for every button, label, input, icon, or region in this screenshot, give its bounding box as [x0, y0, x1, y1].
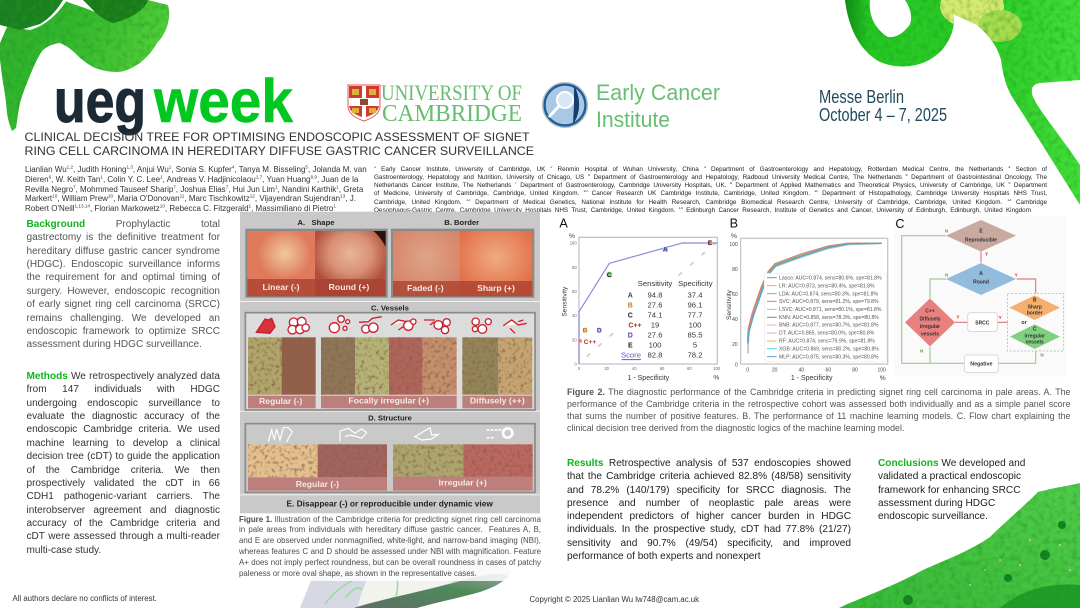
model legend: RF: AUC=0.874, sens=79.9%, spe=81.8%	[779, 339, 875, 345]
text block: results: performance of both experts and nonexpert	[567, 551, 761, 562]
figure 1: Cambridge criteria illustration panel	[240, 212, 540, 514]
axis labels: 40	[732, 317, 738, 323]
vessel photographs	[248, 337, 532, 395]
panel B: border: Sharp (+)	[477, 283, 515, 293]
sensitivity and specificity table: Score	[621, 350, 641, 359]
negative paths	[902, 236, 1036, 363]
chart A: Cambridge criteria ROC and table: 60	[660, 366, 665, 371]
figure 1 caption: in pale areas from individuals with hereditary diffuse gastric cancer. Features A, B,	[239, 525, 541, 534]
text block: results: and 78.2% (140/179) specificity for SRCC diagnosis. The	[567, 485, 851, 496]
decision nodes: border	[1027, 311, 1043, 317]
text block: conclusions	[878, 458, 1025, 522]
structure icons	[268, 428, 512, 442]
chart B: machine learning model ROC curves: 100	[877, 367, 886, 373]
figure 1 caption: whereas features C and D should be assessed under NBI with magnification. Feature	[239, 547, 541, 556]
model legend: LSVC: AUC=0.871, sens=80.1%, spe=81.8%	[779, 307, 882, 313]
chart B: machine learning model ROC curves: 20	[772, 367, 778, 373]
chart A: Cambridge criteria ROC and table: 40	[632, 366, 637, 371]
chart B: machine learning model ROC curves: 0	[746, 367, 749, 373]
model legend: BNB: AUC=0.877, sens=80.7%, spe=81.8%	[779, 323, 879, 329]
text block: results: Results Retrospective analysis of 537 endoscopies showed	[567, 458, 851, 469]
sensitivity and specificity table: D	[628, 332, 633, 339]
logo: Early Cancer Institute	[542, 80, 720, 132]
sensitivity and specificity table: 96.1	[688, 300, 702, 309]
positive paths	[955, 252, 1036, 322]
figure 2 caption: Figure 2. The diagnostic performance of the Cambridge criteria in predicting signet ring cell carcinoma in pale areas. A. The	[567, 387, 1070, 397]
title: RING CELL CARCINOMA IN HEREDITARY DIFFUSE GASTRIC CANCER SURVEILLANCE	[24, 144, 534, 158]
criteria points: D	[597, 327, 602, 334]
axis labels: 80	[732, 267, 738, 273]
chart B: machine learning model ROC curves: 1 - Specificity	[791, 375, 833, 382]
logo: Early Cancer Institute: Early Cancer	[596, 80, 720, 105]
sensitivity and specificity table: B	[628, 302, 633, 309]
text block: methods: interobserver agreement and diagnostic	[26, 505, 220, 516]
criteria points: C++	[584, 339, 596, 346]
criteria points: E	[708, 240, 713, 247]
path labels: N	[945, 228, 949, 233]
panel C: vessels: Diffusely (++)	[470, 395, 525, 405]
sensitivity and specificity table: C	[628, 312, 633, 319]
panel B: border: Faded (-)	[407, 283, 444, 293]
text block: conclusions: endoscopic surveillance.	[878, 511, 988, 522]
text block: results: individuals. In the prospective study, cDT had 77.8% (21/27)	[567, 524, 851, 535]
panel D: structure: D. Structure	[368, 413, 412, 422]
model legend: DT: AUC=0.865, sens=80.0%, spe=80.8%	[779, 331, 875, 337]
decision nodes: B	[1033, 297, 1037, 303]
text block: background: of early signet ring cell carcinoma (SRCC)	[26, 299, 220, 310]
text block: methods: of the Cambridge criteria. We then	[26, 465, 220, 476]
text block: methods: cDT were assessed through a multi-reader	[26, 531, 220, 542]
chart A: Cambridge criteria ROC and table: A	[559, 216, 568, 230]
logo: University of Cambridge	[348, 80, 522, 127]
criteria points	[578, 240, 713, 346]
event place and date: Messe Berlin	[819, 87, 904, 107]
ROC curves	[748, 243, 882, 353]
chart A: Cambridge criteria ROC and table: 1 - Specificity	[628, 375, 670, 382]
figure 1 caption: and E are observed under nonmagnified, white-light, and narrow-band imaging (NBI),	[239, 536, 541, 545]
text block: background: gastrectomy is the definitive treatment for	[26, 232, 220, 243]
text block: results: sensitivity and 90.7% (49/54) specificity, and improved	[567, 538, 851, 549]
text block: methods: Methods We retrospectively analyzed data	[26, 371, 220, 382]
figure 2 caption: performance of the Cambridge criteria in the retrospective cohort was assessed both individually and as a simple panel score	[567, 399, 1070, 409]
panel C: vessels: Regular (-)	[259, 396, 302, 406]
panel C: vessels	[245, 304, 535, 410]
sensitivity and specificity table: 100	[689, 320, 701, 329]
text block: results: presence and number of neoplastic pale areas were	[567, 498, 851, 509]
decision nodes: C	[1033, 327, 1037, 333]
decision nodes: Diffusely	[919, 317, 941, 323]
authors: Revilla Negro7, Mohmmed Tauseef Sharip7, Joshua Elias7, Hui Jun Lim1, Nandini Karthik1, Greta	[25, 184, 363, 194]
figure 1 caption: paleness or more oval shape, as shown in the representative cases.	[239, 569, 477, 578]
chart A: Cambridge criteria ROC and table	[559, 216, 721, 382]
decision nodes: A	[979, 271, 983, 277]
panel B: border: B. Border	[444, 218, 479, 227]
text block: background: (HDGC). Endoscopic surveillance informs	[26, 259, 220, 270]
text block: conclusions: validated a practical endoscopic	[878, 471, 1021, 482]
text block: methods: machine learning to develop a clinical	[26, 438, 220, 449]
panel A: shape: A. Shape	[297, 218, 335, 227]
axis labels: 20	[572, 337, 577, 342]
vessel icons	[256, 316, 527, 334]
sensitivity and specificity table: 78.2	[688, 350, 702, 359]
model legend: LR: AUC=0.873, sens=80.4%, spe=81.8%	[779, 283, 875, 289]
path labels: Y	[956, 314, 960, 319]
axis labels: 60	[572, 289, 577, 294]
structure photographs	[248, 444, 533, 477]
text block: methods: decision tree (cDT) to guide the application	[26, 451, 220, 462]
text block: background: Background Prophylactic total	[26, 219, 220, 230]
figure 2 caption: clinical decision tree derived from the diagnostic logics of the machine learning model.	[567, 423, 904, 433]
axis labels	[570, 241, 577, 366]
score ROC line	[579, 243, 717, 364]
text block: methods: evaluate the diagnostic accuracy of the	[26, 411, 220, 422]
axis labels: 60	[732, 292, 738, 298]
illustration: top-left green organ	[0, 0, 169, 131]
sensitivity and specificity table: 85.5	[688, 330, 702, 339]
text block: methods: from 147 individuals with HDGC	[26, 384, 220, 395]
panel A: shape	[245, 218, 388, 298]
chart B: machine learning model ROC curves: 80	[852, 367, 858, 373]
panel D: structure	[245, 413, 535, 492]
logo: ueg week	[54, 67, 294, 136]
text block: background: hereditary diffuse gastric cancer syndrome	[26, 246, 220, 257]
text block: conclusions: Conclusions We developed and	[878, 458, 1025, 469]
sensitivity and specificity table: 5	[693, 340, 697, 349]
text block: methods: prospectively validated the cDT in 66	[26, 478, 220, 489]
model legend: LDA: AUC=0.874, sens=80.3%, spe=81.8%	[779, 291, 878, 297]
panel B: border	[391, 218, 534, 298]
axis labels: 0	[735, 363, 738, 369]
axis labels	[729, 242, 738, 369]
text block: methods: accuracy of the Cambridge criteria and	[26, 518, 220, 529]
panel C: vessels: C. Vessels	[371, 304, 409, 313]
path labels: N	[1040, 352, 1044, 357]
sensitivity and specificity table: 100	[649, 340, 661, 349]
panel A: shape: Linear (-)	[262, 282, 300, 292]
axis labels: 100	[570, 241, 577, 246]
axis labels: 20	[732, 342, 738, 348]
footer: copyright: Copyright © 2025 Lianlian Wu lw748@cam.ac.uk	[530, 595, 699, 604]
sensitivity and specificity table: 94.8	[648, 291, 662, 300]
figure 1 caption: Figure 1. Illustration of the Cambridge criteria for predicting signet ring cell carcinoma	[239, 514, 541, 524]
model legend: SVC: AUC=0.879, sens=81.2%, spe=79.8%	[779, 299, 879, 305]
text block: background: assessment during HDGC surveillance.	[26, 339, 202, 350]
chart B: machine learning model ROC curves: %	[880, 375, 886, 382]
logo: Early Cancer Institute: Institute	[596, 107, 670, 132]
sensitivity and specificity table: E	[628, 342, 633, 349]
chart A: Cambridge criteria ROC and table: %	[713, 374, 719, 381]
decision nodes: Reproducible	[965, 238, 997, 244]
sensitivity and specificity table: C++	[628, 322, 642, 329]
decision nodes: SRCC	[975, 320, 990, 326]
chart A: Cambridge criteria ROC and table: 20	[604, 366, 610, 371]
path labels: N	[945, 272, 949, 277]
sensitivity and specificity table: Specificity	[678, 279, 713, 288]
panel C: vessels: Focally irregular (+)	[348, 395, 429, 405]
axis labels: 0	[574, 361, 577, 366]
text block: conclusions: framework for enhancing SRCC	[878, 485, 1020, 496]
text block: background: surgery. However, endoscopic recognition	[26, 286, 220, 297]
illustration: pale organ behind figure caption	[300, 534, 511, 608]
chart A: Cambridge criteria ROC and table: 80	[687, 366, 692, 371]
affiliations	[374, 166, 1047, 214]
path labels: N	[920, 348, 924, 353]
figure 1 caption	[239, 514, 541, 581]
sensitivity and specificity table: 77.7	[688, 310, 702, 319]
decision nodes: irregular	[1025, 334, 1045, 340]
decision nodes	[905, 220, 1060, 373]
text block: results: independent predictors of higher cancer burden in HDGC	[567, 511, 851, 522]
criteria points: C	[607, 272, 612, 279]
path labels	[920, 228, 1044, 357]
model legend: XGB: AUC=0.869, sens=80.2%, spe=80.8%	[779, 346, 879, 352]
text block: background	[26, 219, 220, 350]
chart A: Cambridge criteria ROC and table: %	[569, 233, 575, 240]
logo: ueg week: ueg	[54, 67, 146, 135]
path labels: Y	[999, 315, 1003, 320]
model legend: MLP: AUC=0.875, sens=80.3%, spe=80.8%	[779, 354, 879, 360]
text block: background: endoscopic framework to optimize SRCC	[26, 326, 220, 337]
panel A: shape: Round (+)	[329, 282, 369, 292]
sensitivity and specificity table: 19	[651, 320, 659, 329]
panel E: dynamic view: E. Disappear (-) or reproducible under dynamic view	[286, 499, 493, 509]
sensitivity and specificity table: 27.6	[648, 330, 662, 339]
authors	[25, 164, 367, 213]
text block: methods: endoscopic Cambridge criteria. We used	[26, 424, 220, 435]
decision nodes: irregular	[920, 324, 940, 330]
chart C: clinical decision tree flow chart: C	[895, 217, 904, 231]
decision nodes: or	[1021, 320, 1027, 326]
decision nodes: C++	[925, 309, 935, 315]
text block: conclusions: assessment during HDGC	[878, 498, 995, 509]
decision nodes: vessels	[1026, 340, 1044, 346]
sensitivity and specificity table: 82.8	[648, 350, 662, 359]
figure 2 caption: that sums the number of positive features. B. The performance of 11 machine learning models. C. Flow chart explaining the	[567, 411, 1070, 421]
panel D: structure: Irregular (+)	[438, 478, 487, 488]
authors: Markert10, William Prew10, Maria O'Donovan11, Marc Tischkowitz12, Vijayendran Sujendran13, J.	[25, 194, 356, 203]
title	[24, 130, 534, 158]
chart A: Cambridge criteria ROC and table: 0	[578, 366, 581, 371]
panel D: structure: Regular (-)	[296, 479, 339, 489]
chart A: Cambridge criteria ROC and table: 100	[713, 366, 721, 371]
path labels: Y	[985, 252, 989, 257]
illustration: bottom-right green organ	[839, 483, 1080, 608]
text block: background: remains challenging. We developed an	[26, 313, 220, 324]
text block: results: that the Cambridge criteria achieved 82.8% (48/58) sensitivity	[567, 471, 851, 482]
logo: University of Cambridge: CAMBRIDGE	[382, 100, 522, 127]
decision nodes: Negative	[970, 362, 992, 368]
axis labels: 80	[572, 265, 577, 270]
chart A: Cambridge criteria ROC and table: Sensitivity	[562, 286, 569, 317]
axis labels: 40	[572, 313, 577, 318]
chart B: machine learning model ROC curves: Sensitivity	[726, 289, 733, 320]
illustration: top-right green organ	[845, 0, 1080, 205]
sensitivity and specificity table	[620, 278, 716, 362]
authors: Dieren6, W. Keith Tan1, Colin Y. C. Lee1, Andreas V. Hadjinicolaou1,7, Yuan Huang8,9, Juan de la	[25, 174, 358, 184]
criteria points: B	[583, 327, 588, 334]
chart B: machine learning model ROC curves: B	[730, 216, 738, 230]
footer: disclosure: All authors declare no conflicts of interest.	[12, 594, 157, 603]
figure 1 caption: A+ does not imply perfect roundness, but can be overall roundness in cases of patchy	[239, 558, 541, 567]
chart C: clinical decision tree flow chart	[895, 217, 1064, 374]
model legend	[764, 273, 887, 362]
sensitivity and specificity table: 27.6	[648, 300, 662, 309]
model legend: Lasso: AUC=0.874, sens=80.6%, spe=81.8%	[779, 275, 882, 281]
chart B: machine learning model ROC curves: 40	[799, 367, 804, 373]
authors: Robert O'Neill1,13,14, Florian Markowetz10, Rebecca C. Fitzgerald1, Massimiliano di Pietro1	[25, 204, 336, 213]
decision nodes: E	[979, 229, 983, 235]
text block: background: the requirement for and optimal timing of	[26, 272, 220, 283]
figure 2 caption	[567, 387, 1070, 433]
chart B: machine learning model ROC curves: 60	[826, 367, 831, 373]
sensitivity and specificity table: 74.1	[648, 310, 662, 319]
sensitivity and specificity table: 37.4	[688, 291, 703, 300]
path labels: Y	[1015, 272, 1019, 277]
chart B: machine learning model ROC curves	[726, 216, 888, 382]
logo: ueg week: week	[153, 67, 293, 135]
text block: methods	[26, 371, 220, 556]
sensitivity and specificity table: A	[628, 293, 633, 300]
decision nodes: Sharp	[1028, 304, 1042, 310]
decision nodes: Round	[973, 279, 989, 285]
text block: methods: multi-case study.	[26, 545, 101, 556]
text block: methods: CDH1 pathogenic-variant carriers. The	[26, 491, 220, 502]
axis labels: 100	[729, 242, 738, 248]
text block: results	[567, 458, 851, 562]
decision nodes: vessels	[921, 331, 939, 337]
text block: methods: undergoing endoscopic surveillance to	[26, 398, 220, 409]
event place and date	[819, 87, 947, 125]
title: CLINICAL DECISION TREE FOR OPTIMISING ENDOSCOPIC ASSESSMENT OF SIGNET	[24, 130, 530, 144]
chart B: machine learning model ROC curves: %	[731, 233, 737, 240]
model legend: KNN: AUC=0.858, sens=78.3%, spe=80.8%	[779, 315, 879, 321]
sensitivity and specificity table: Sensitivity	[638, 279, 672, 288]
criteria points: A	[663, 247, 668, 254]
authors: Lianlian Wu1,2, Judith Honing1,3, Anjui Wu1, Sonia S. Kupfer4, Tanya M. Bisseling5, Jolanda M. van	[25, 164, 367, 174]
